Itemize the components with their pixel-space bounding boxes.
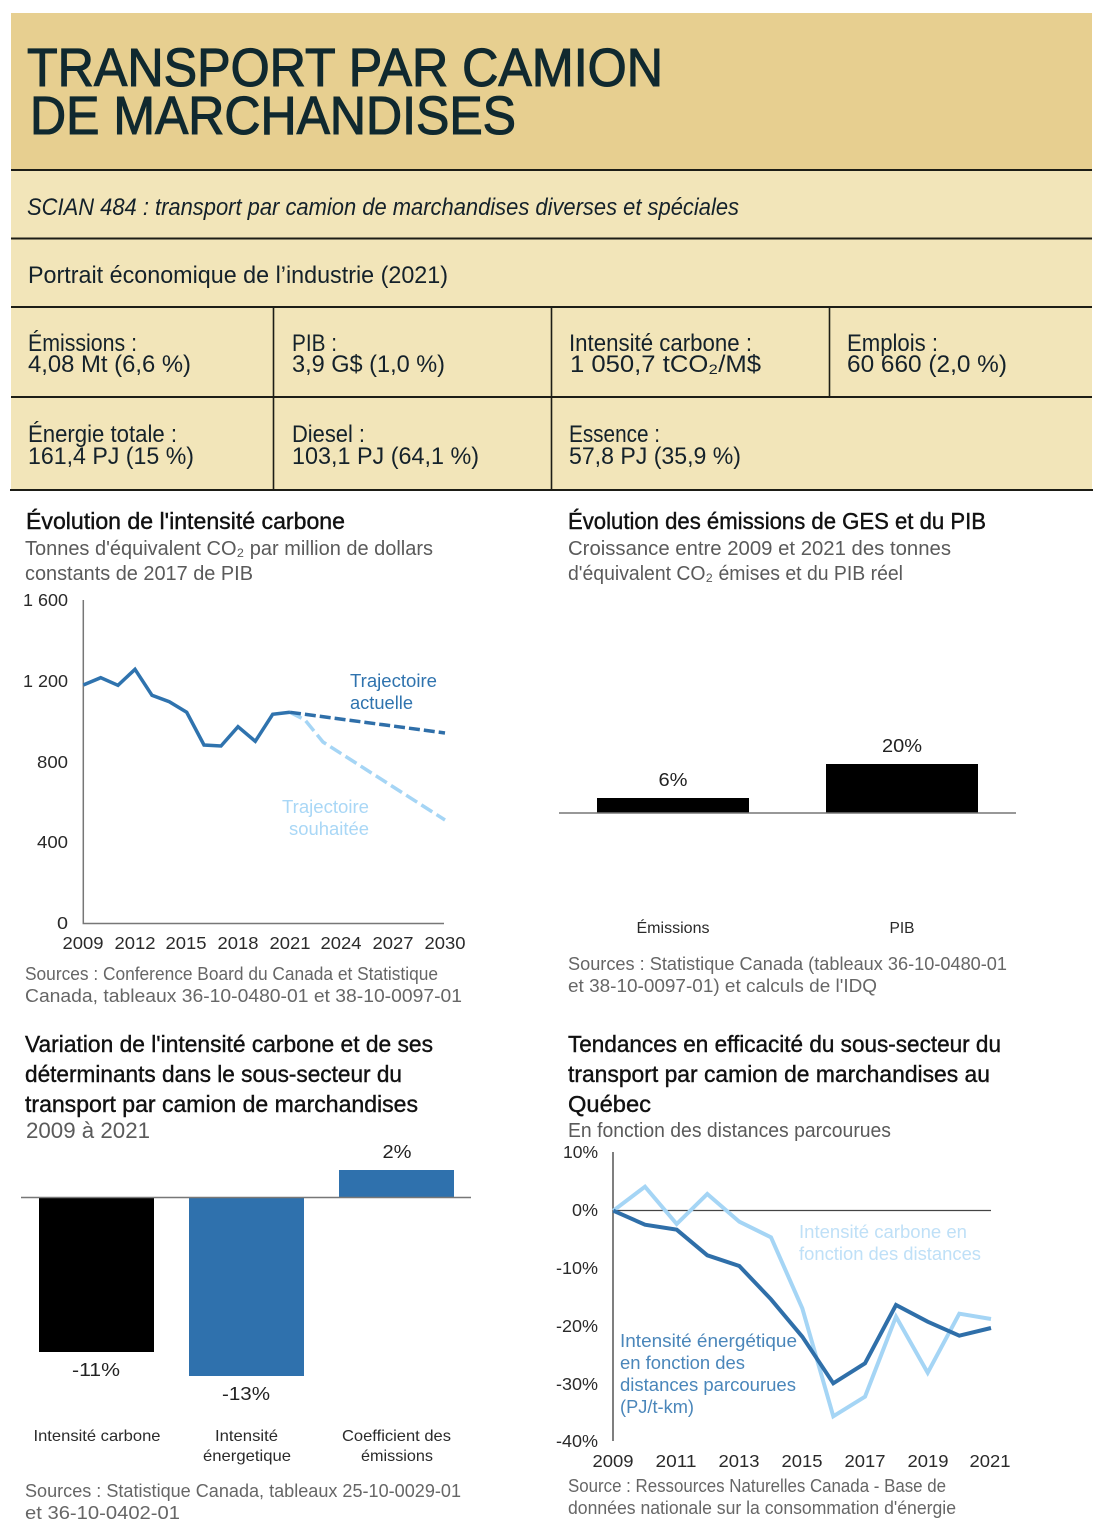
- bar chart: [559, 736, 1016, 937]
- subtitle: constants de 2017 de PIB: [25, 563, 253, 585]
- subtitle: Croissance entre 2009 et 2021 des tonnes: [568, 538, 951, 560]
- bar chart: -13%: [222, 1384, 270, 1404]
- subtitle: d'équivalent CO₂ émises et du PIB réel: [568, 563, 903, 585]
- stat: jobs: 60 660 (2,0 %): [847, 351, 1007, 378]
- line chart: 2015: [782, 1451, 822, 1471]
- bar chart: Intensité carbone: [34, 1428, 161, 1445]
- stat: gasoline: 57,8 PJ (35,9 %): [569, 443, 741, 470]
- line chart: 2024: [320, 933, 362, 953]
- panel: GHG emissions and GDP evolution: [559, 508, 1016, 996]
- line chart: 2030: [424, 933, 466, 953]
- line chart: 2027: [372, 933, 414, 953]
- label: desired trajectory: [282, 796, 369, 839]
- label: energy intensity: distances parcourues: [620, 1374, 796, 1395]
- sources: Sources : Conference Board du Canada et Statistique: [25, 964, 438, 984]
- bar chart: énergetique: [203, 1448, 291, 1465]
- line chart: 2012: [114, 933, 156, 953]
- stat: gasoline: Essence :: [569, 421, 660, 448]
- heading: déterminants dans le sous-secteur du: [25, 1061, 402, 1087]
- stat: gasoline: [569, 421, 741, 470]
- bar chart: 2%: [382, 1142, 412, 1162]
- line chart: 2017: [844, 1451, 886, 1471]
- line chart: 2013: [718, 1451, 760, 1471]
- NAICS subtitle: SCIAN 484 : transport par camion de marchandises diverses et spéciales: [27, 194, 739, 221]
- line chart: 2021: [970, 1451, 1010, 1471]
- stat: total energy: [28, 421, 194, 470]
- stat: carbon intensity: 1 050,7 tCO₂/M$: [570, 351, 761, 378]
- line chart: 400: [37, 832, 68, 852]
- subtitle: En fonction des distances parcourues: [568, 1120, 891, 1142]
- line chart: 1 200: [23, 671, 68, 691]
- sources: et 38-10-0097-01) et calculs de l'IDQ: [568, 976, 877, 996]
- source: Source : Ressources Naturelles Canada - Base de: [568, 1476, 946, 1496]
- line chart: 2009: [592, 1451, 634, 1471]
- line chart: 2011: [656, 1451, 696, 1471]
- panel: carbon intensity evolution: [23, 508, 466, 1006]
- sources: Canada, tableaux 36-10-0480-01 et 38-10-0097-01: [25, 986, 462, 1006]
- title banner: DE MARCHANDISES: [30, 86, 516, 146]
- bar chart: -11%: [72, 1360, 120, 1380]
- economic portrait heading: Portrait économique de l’industrie (2021): [28, 262, 448, 289]
- stat: total energy: 161,4 PJ (15 %): [28, 443, 194, 470]
- stat: emissions: 4,08 Mt (6,6 %): [28, 351, 191, 378]
- heading: Québec: [568, 1091, 651, 1117]
- stat: jobs: Emplois :: [847, 330, 938, 357]
- line chart: 0: [57, 913, 68, 933]
- stat: GDP: 3,9 G$ (1,0 %): [292, 351, 445, 378]
- line chart: 2009: [62, 933, 104, 953]
- title banner: [11, 13, 1092, 170]
- line chart: 2021: [270, 933, 310, 953]
- line chart: 1 600: [23, 590, 68, 610]
- bar chart: Intensité: [215, 1428, 278, 1445]
- stat: carbon intensity: [569, 330, 761, 378]
- heading: Tendances en efficacité du sous-secteur du: [568, 1031, 1001, 1057]
- label: carbon intensity: fonction des distances: [799, 1243, 981, 1264]
- heading: Variation de l'intensité carbone et de ses: [25, 1031, 433, 1057]
- label: energy intensity: (PJ/t-km): [620, 1396, 694, 1417]
- label: current trajectory: actuelle: [350, 692, 413, 713]
- label: desired trajectory: Trajectoire: [282, 796, 369, 817]
- line chart: 2019: [908, 1451, 948, 1471]
- title banner: TRANSPORT PAR CAMION: [27, 38, 663, 98]
- subtitle: Tonnes d'équivalent CO₂ par million de dollars: [25, 538, 433, 560]
- sources: [25, 1481, 461, 1523]
- bar chart: [21, 1142, 471, 1465]
- stat: emissions: [28, 330, 191, 378]
- source: [568, 1476, 956, 1518]
- line chart: [23, 590, 466, 953]
- sources: [25, 964, 462, 1006]
- stat: carbon intensity: Intensité carbone :: [569, 330, 752, 357]
- bar chart: 6%: [658, 770, 688, 790]
- label: carbon intensity: Intensité carbone en: [799, 1221, 967, 1242]
- panel: industry summary table: [10, 170, 1093, 490]
- stat: GDP: PIB :: [292, 330, 337, 357]
- line chart: -10%: [556, 1258, 598, 1278]
- line chart: -40%: [556, 1431, 598, 1451]
- line chart: 2015: [166, 933, 206, 953]
- sources: et 36-10-0402-01: [25, 1503, 180, 1523]
- heading: transport par camion de marchandises: [25, 1091, 418, 1117]
- line chart: [556, 1142, 1010, 1471]
- stat: total energy: Énergie totale :: [28, 421, 177, 448]
- stat: diesel: 103,1 PJ (64,1 %): [292, 443, 479, 470]
- stat: jobs: [847, 330, 1007, 378]
- label: current trajectory: [350, 670, 437, 713]
- line chart: -20%: [556, 1316, 598, 1336]
- sources: [568, 954, 1007, 996]
- label: energy intensity: [620, 1330, 797, 1417]
- line chart: 0%: [572, 1200, 598, 1220]
- panel: carbon intensity determinants: [21, 1031, 471, 1523]
- label: current trajectory: Trajectoire: [350, 670, 437, 691]
- line chart: 2018: [218, 933, 258, 953]
- label: carbon intensity: [799, 1221, 981, 1264]
- subtitle: 2009 à 2021: [26, 1118, 150, 1143]
- line chart: 800: [37, 752, 68, 772]
- line chart: -30%: [556, 1374, 598, 1394]
- subtitle: [568, 538, 951, 585]
- bar chart: émissions: [361, 1448, 433, 1465]
- stat: GDP: [292, 330, 445, 378]
- stat: diesel: Diesel :: [292, 421, 365, 448]
- heading: [568, 1031, 1001, 1117]
- sources: Sources : Statistique Canada, tableaux 25-10-0029-01: [25, 1481, 461, 1501]
- heading: Évolution des émissions de GES et du PIB: [568, 508, 986, 534]
- heading: [25, 1031, 433, 1117]
- label: energy intensity: en fonction des: [620, 1352, 745, 1373]
- label: desired trajectory: souhaitée: [289, 818, 369, 839]
- bar chart: PIB: [890, 920, 914, 937]
- bar chart: 20%: [882, 736, 922, 756]
- line chart: 10%: [563, 1142, 598, 1162]
- heading: Évolution de l'intensité carbone: [26, 508, 345, 534]
- bar chart: Émissions: [636, 918, 710, 937]
- heading: transport par camion de marchandises au: [568, 1061, 990, 1087]
- stat: emissions: Émissions :: [28, 330, 137, 357]
- stat: diesel: [292, 421, 479, 470]
- label: energy intensity: Intensité énergétique: [620, 1330, 797, 1351]
- sources: Sources : Statistique Canada (tableaux 36-10-0480-01: [568, 954, 1007, 974]
- subtitle: [25, 538, 433, 585]
- source: données nationale sur la consommation d'énergie: [568, 1498, 956, 1518]
- bar chart: Coefficient des: [342, 1428, 451, 1445]
- panel: efficiency trends: [556, 1031, 1010, 1518]
